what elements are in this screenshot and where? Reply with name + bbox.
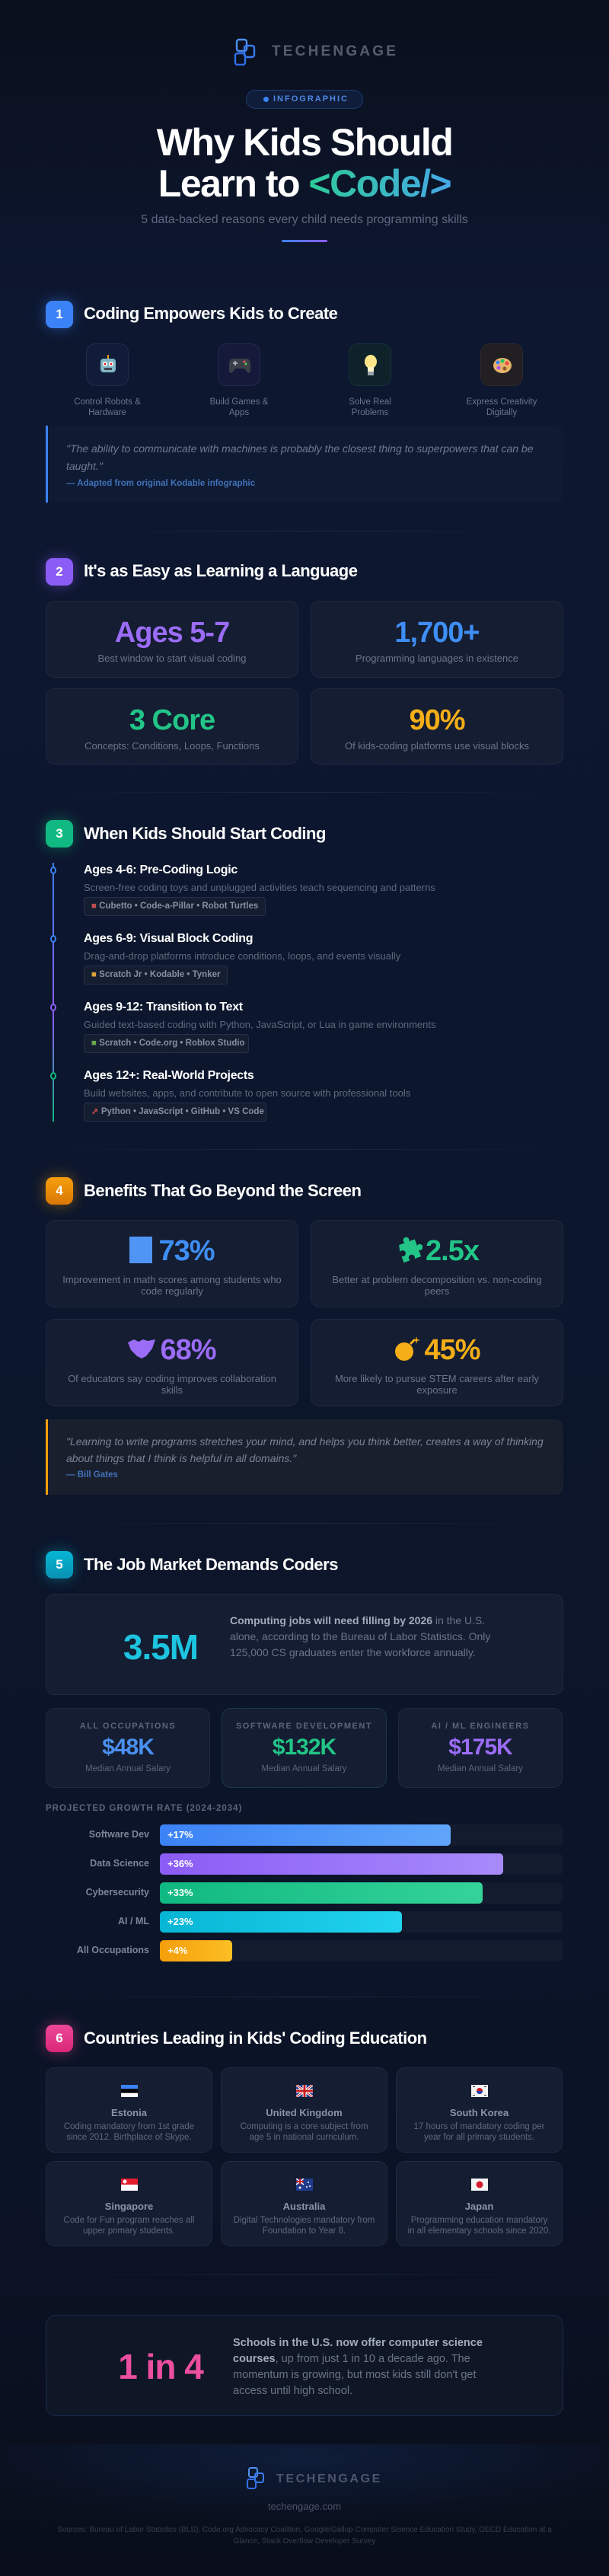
quote 2: "Learning to write programs stretches your mind, and helps you think better, creates a way of thinking about things that I think is helpful in all domains." <box>66 1435 544 1464</box>
label: Control Robots & <box>74 397 141 407</box>
benefit card 73%: Improvement in math scores among students who code regularly <box>62 1274 282 1297</box>
label: Problems <box>352 408 388 417</box>
growth chart: +33% <box>167 1887 193 1898</box>
label <box>210 397 268 417</box>
quote 1 <box>46 426 563 503</box>
badge 6 <box>46 2025 73 2052</box>
heading 1: Coding Empowers Kids to Create <box>84 304 337 323</box>
country: estonia: Estonia <box>111 2107 147 2118</box>
salary: software <box>222 1708 387 1788</box>
country: australia <box>221 2161 387 2246</box>
stat card: ages <box>46 601 298 678</box>
step 2: Ages 6-9: Visual Block Coding <box>84 932 253 945</box>
country: korea: 17 hours of mandatory coding per year for all primary students. <box>414 2122 544 2142</box>
section 4 <box>37 1168 563 1495</box>
benefit card 73%: 73% <box>158 1235 215 1267</box>
benefit card 68%: 68% <box>160 1334 216 1366</box>
heading 3: When Kids Should Start Coding <box>84 824 326 843</box>
heading 4: Benefits That Go Beyond the Screen <box>84 1181 361 1200</box>
label: Solve Real <box>349 397 391 407</box>
jobs card <box>46 1594 563 1695</box>
callout: 1 in 4: 1 in 4 <box>118 2347 203 2386</box>
benefit card 2.5x <box>311 1220 563 1307</box>
step 2 <box>84 932 400 985</box>
salary: all: Median Annual Salary <box>85 1764 171 1773</box>
title <box>157 121 452 205</box>
label: Hardware <box>88 408 126 417</box>
section 5 <box>38 1543 563 1962</box>
header logo <box>234 38 398 65</box>
step 4 <box>84 1069 410 1122</box>
label <box>349 397 391 417</box>
country: singapore: Code for Fun program reaches all upper primary students. <box>64 2216 194 2236</box>
badge 6: 6 <box>56 2031 63 2045</box>
step 4: ➚ Python • JavaScript • GitHub • VS Code <box>91 1107 264 1116</box>
salary: ai: $175K <box>448 1735 512 1760</box>
step 3 <box>84 1001 435 1053</box>
timeline dots <box>50 867 56 1080</box>
benefit card 68% <box>46 1319 298 1406</box>
quote 2: — Bill Gates <box>66 1470 118 1480</box>
country: uk <box>221 2067 387 2153</box>
sources: Sources: Bureau of Labor Statistics (BLS), Code.org Advocacy Coalition, Google/Gallup Computer Science Education Study, OECD Education at a Glance, Stack Overflow Developer Survey <box>57 2526 552 2546</box>
title: Why Kids Should <box>157 121 452 164</box>
growth chart: PROJECTED GROWTH RATE (2024-2034) <box>46 1804 242 1813</box>
label: Express Creativity <box>467 397 537 407</box>
growth chart: Cybersecurity <box>86 1887 149 1898</box>
pill: infographic <box>246 90 363 109</box>
growth chart: +4% <box>167 1945 187 1956</box>
section 1 <box>38 292 537 503</box>
quote 1: — Adapted from original Kodable infographic <box>66 479 255 488</box>
salary: software: SOFTWARE DEVELOPMENT <box>236 1722 372 1731</box>
country: uk: United Kingdom <box>266 2107 343 2118</box>
salary: ai: Median Annual Salary <box>438 1764 523 1773</box>
pill: infographic: INFOGRAPHIC <box>273 94 349 104</box>
country: korea <box>396 2067 563 2153</box>
badge 3: 3 <box>56 826 63 841</box>
timeline line <box>53 863 54 1122</box>
step 1: Screen-free coding toys and unplugged activities teach sequencing and patterns <box>84 882 435 893</box>
stat card: 90% <box>311 688 563 765</box>
badge 5: 5 <box>56 1557 63 1572</box>
country: japan: Programming education mandatory in all elementary schools since 2020. <box>408 2216 550 2236</box>
callout: 1 in 4: Schools in the U.S. now offer computer science courses, up from just 1 in 10 a decade ago. The momentum is growing, but most kids still don't get access until high school. <box>233 2337 483 2397</box>
step 1 <box>84 863 435 916</box>
title: Learn to <Code/> <box>158 162 451 205</box>
icon: bulb <box>349 343 391 386</box>
benefit card 45% <box>311 1319 563 1406</box>
stat card: ages: Ages 5-7 <box>115 617 229 649</box>
heading 5: The Job Market Demands Coders <box>84 1555 338 1574</box>
country: singapore <box>46 2161 212 2246</box>
badge 4 <box>46 1177 73 1205</box>
footer url: techengage.com <box>268 2501 341 2512</box>
footer <box>0 2444 609 2576</box>
section 6 <box>37 2016 563 2246</box>
badge 1: 1 <box>56 307 63 321</box>
stat card: core: Concepts: Conditions, Loops, Functions <box>84 740 260 752</box>
label: Apps <box>229 408 249 417</box>
country: australia: Digital Technologies mandatory from Foundation to Year 8. <box>234 2216 375 2236</box>
stat card: 90%: Of kids-coding platforms use visual blocks <box>345 740 529 752</box>
growth chart: +36% <box>167 1858 193 1869</box>
badge 4: 4 <box>56 1183 63 1198</box>
salary: all: ALL OCCUPATIONS <box>80 1722 176 1731</box>
benefit card 73% <box>46 1220 298 1307</box>
label <box>467 397 537 417</box>
stat card: core: 3 Core <box>129 704 215 736</box>
benefit card 45%: 45% <box>424 1334 480 1366</box>
icon: palette <box>480 343 523 386</box>
header logo: TECHENGAGE <box>272 43 398 59</box>
stat card: languages <box>311 601 563 678</box>
heading 6: Countries Leading in Kids' Coding Education <box>84 2029 427 2048</box>
quote 2 <box>46 1419 563 1495</box>
growth chart: +23% <box>167 1916 193 1927</box>
footer logo <box>247 2467 382 2489</box>
country: estonia <box>46 2067 212 2153</box>
benefit card 2.5x: Better at problem decomposition vs. non-coding peers <box>332 1274 542 1297</box>
country: australia: Australia <box>283 2201 325 2212</box>
growth chart: All Occupations <box>77 1945 149 1955</box>
stat card: languages: 1,700+ <box>394 617 480 649</box>
country: japan <box>396 2161 563 2246</box>
badge 3 <box>46 820 73 847</box>
salary: all <box>46 1708 210 1788</box>
growth chart: +17% <box>167 1829 193 1840</box>
badge 2: 2 <box>56 564 63 579</box>
label: Build Games & <box>210 397 268 407</box>
stat card: 90%: 90% <box>409 704 465 736</box>
footer logo: TECHENGAGE <box>276 2472 382 2485</box>
growth chart: AI / ML <box>118 1916 149 1926</box>
salary: ai <box>398 1708 563 1788</box>
quote 1: "The ability to communicate with machines is probably the closest thing to superpowers that can be taught." <box>66 442 534 472</box>
jobs card: Computing jobs will need filling by 2026 in the U.S. alone, according to the Bureau of Labor Statistics. Only 125,000 CS graduates enter the workforce annually. <box>230 1614 490 1658</box>
growth chart: Software Dev <box>89 1829 149 1840</box>
section 2 <box>38 550 563 765</box>
badge 5 <box>46 1551 73 1578</box>
icon: robot <box>86 343 129 386</box>
benefit card 2.5x: 2.5x <box>426 1235 479 1267</box>
label <box>74 397 141 417</box>
step 3: Guided text-based coding with Python, JavaScript, or Lua in game environments <box>84 1019 435 1030</box>
step 1: Ages 4-6: Pre-Coding Logic <box>84 863 238 876</box>
label: Digitally <box>486 408 517 417</box>
growth chart <box>46 1804 562 1962</box>
step 3: Ages 9-12: Transition to Text <box>84 1001 243 1013</box>
country: uk: Computing is a core subject from age 5 in national curriculum. <box>240 2122 368 2142</box>
salary: software: Median Annual Salary <box>262 1764 346 1773</box>
section 3 <box>38 813 435 1122</box>
badge 1 <box>46 301 73 328</box>
heading 2: It's as Easy as Learning a Language <box>84 561 357 580</box>
step 2: ■ Scratch Jr • Kodable • Tynker <box>91 970 220 979</box>
subtitle: 5 data-backed reasons every child needs programming skills <box>141 213 468 226</box>
country: korea: South Korea <box>450 2107 509 2118</box>
step 2: Drag-and-drop platforms introduce conditions, loops, and events visually <box>84 950 400 962</box>
benefit card 68%: Of educators say coding improves collaboration skills <box>68 1373 276 1396</box>
icon: gamepad <box>218 343 260 386</box>
salary: software: $132K <box>273 1735 336 1760</box>
step 3: ■ Scratch • Code.org • Roblox Studio <box>91 1039 245 1048</box>
stat card: core <box>46 688 298 765</box>
growth chart: Data Science <box>90 1858 149 1869</box>
badge 2 <box>46 558 73 586</box>
country: japan: Japan <box>465 2201 493 2212</box>
benefit card 45%: More likely to pursue STEM careers after early exposure <box>335 1373 539 1396</box>
salary: all: $48K <box>102 1735 154 1760</box>
jobs card: 3.5M <box>123 1627 198 1667</box>
step 4: Build websites, apps, and contribute to open source with professional tools <box>84 1087 410 1099</box>
country: singapore: Singapore <box>105 2201 153 2212</box>
stat card: ages: Best window to start visual coding <box>97 653 247 664</box>
step 4: Ages 12+: Real-World Projects <box>84 1069 254 1082</box>
callout: 1 in 4 <box>46 2315 563 2416</box>
stat card: languages: Programming languages in existence <box>356 653 518 664</box>
country: estonia: Coding mandatory from 1st grade since 2012. Birthplace of Skype. <box>64 2122 194 2142</box>
salary: ai: AI / ML ENGINEERS <box>431 1722 530 1731</box>
step 1: ■ Cubetto • Code-a-Pillar • Robot Turtles <box>91 902 258 911</box>
